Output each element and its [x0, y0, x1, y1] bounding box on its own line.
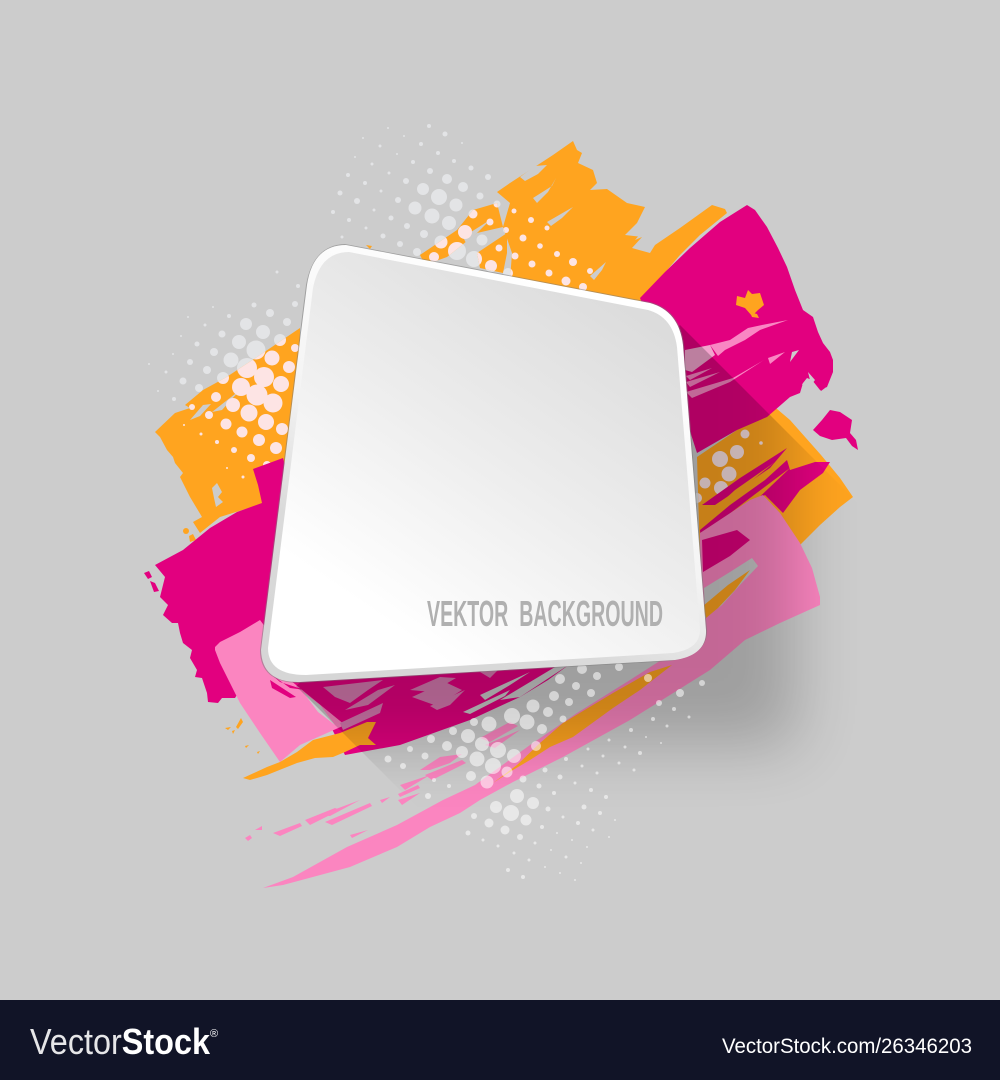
footer url: VectorStock.com/26346203 — [722, 1035, 972, 1058]
grey gaps in magenta strip — [303, 664, 570, 725]
brush stroke: pink long right band — [263, 495, 820, 888]
grey gaps in orange — [190, 165, 648, 507]
brush stroke: magenta left — [155, 458, 295, 703]
brush stroke: orange left — [155, 328, 300, 533]
brush stroke: orange diagonal over pink band — [493, 665, 672, 783]
patches over pink right band — [702, 530, 758, 618]
halftone dots: top and left on grey — [148, 124, 763, 503]
streaks in magenta strip — [323, 668, 500, 730]
footer registered mark: ® — [210, 1028, 218, 1040]
orange specks — [225, 718, 260, 754]
brush stroke: magenta strip under card — [278, 664, 570, 755]
halftone dots tinted on orange — [183, 203, 763, 503]
brush stroke: orange top — [155, 141, 853, 560]
details inside magenta top right — [685, 290, 815, 398]
brush stroke: magenta right streak — [700, 460, 830, 570]
magenta small teeth — [270, 675, 305, 698]
card long shadow — [296, 325, 826, 776]
brush stroke: orange right — [697, 403, 853, 560]
card rim — [261, 245, 706, 682]
brush stroke: magenta top right — [144, 205, 858, 755]
white card — [260, 244, 707, 683]
card face — [268, 252, 700, 675]
card dark left edge — [260, 244, 707, 683]
footer logo: VectorStock — [30, 1021, 211, 1062]
brush stroke: orange streak lower left — [243, 722, 376, 780]
brush stroke: pink lower left — [215, 620, 345, 762]
pink streaks — [245, 722, 520, 848]
halftone dots: bottom — [384, 663, 705, 881]
footer bar — [0, 1000, 1000, 1080]
card label: VEKTOR BACKGROUND — [427, 593, 663, 634]
orange teeth across magenta right streak — [702, 462, 790, 550]
